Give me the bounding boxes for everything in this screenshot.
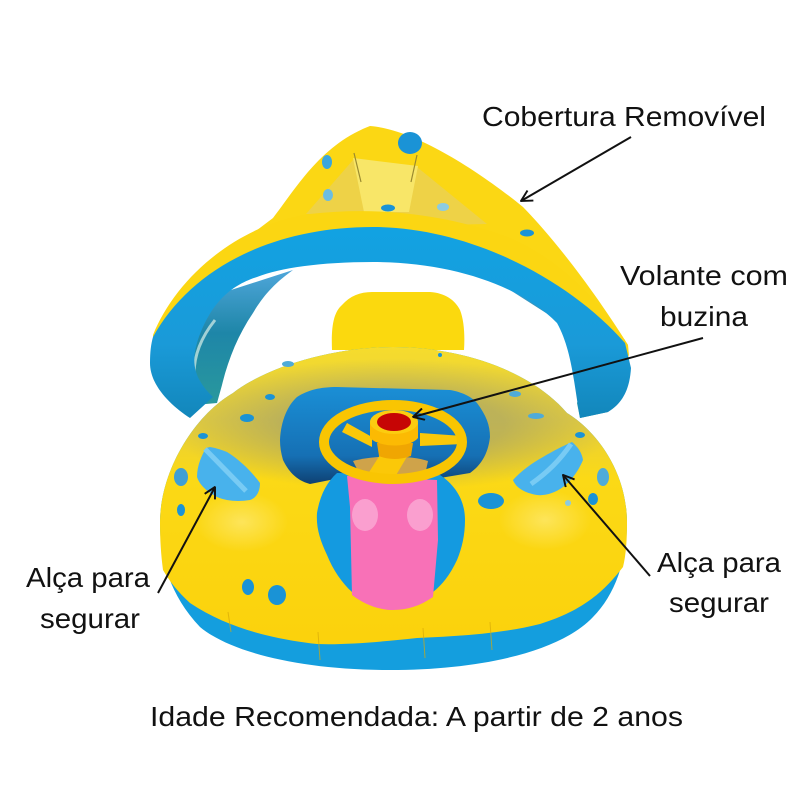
seat opening [280,387,490,484]
callout: right handle: segurar [669,587,769,618]
canopy frame [240,126,629,375]
arrow to steering wheel [413,338,703,417]
steering wheel with horn [324,405,463,482]
callout: Volante com buzina [413,260,788,417]
callout: left handle: Alça para [26,562,150,593]
main float body [160,347,627,670]
recommended age caption: Idade Recomendada: A partir de 2 anos [150,701,683,732]
callout: left handle: segurar [40,603,140,634]
callout: right handle: Alça para [657,547,781,578]
right handle [513,442,583,495]
front pommel [317,473,465,610]
callout: Volante com buzina: Volante com [620,260,788,291]
callout: Cobertura Removível [482,101,766,201]
left handle [197,447,260,501]
arrow to canopy [521,137,631,201]
canopy brim [150,211,631,418]
horn button [377,413,411,431]
arrow to left handle [158,487,215,593]
water drop decorations [174,132,609,605]
callout: Volante com buzina: buzina [660,301,748,332]
arrow to right handle [563,475,650,576]
callout: Cobertura Removível: Cobertura Removível [482,101,766,132]
infographic [26,106,786,732]
canopy right shade [510,290,628,418]
callout: right handle [563,475,781,618]
float product illustration [150,126,631,670]
backrest [332,292,464,350]
canopy left shade [176,270,293,405]
callout: left handle [26,487,215,634]
